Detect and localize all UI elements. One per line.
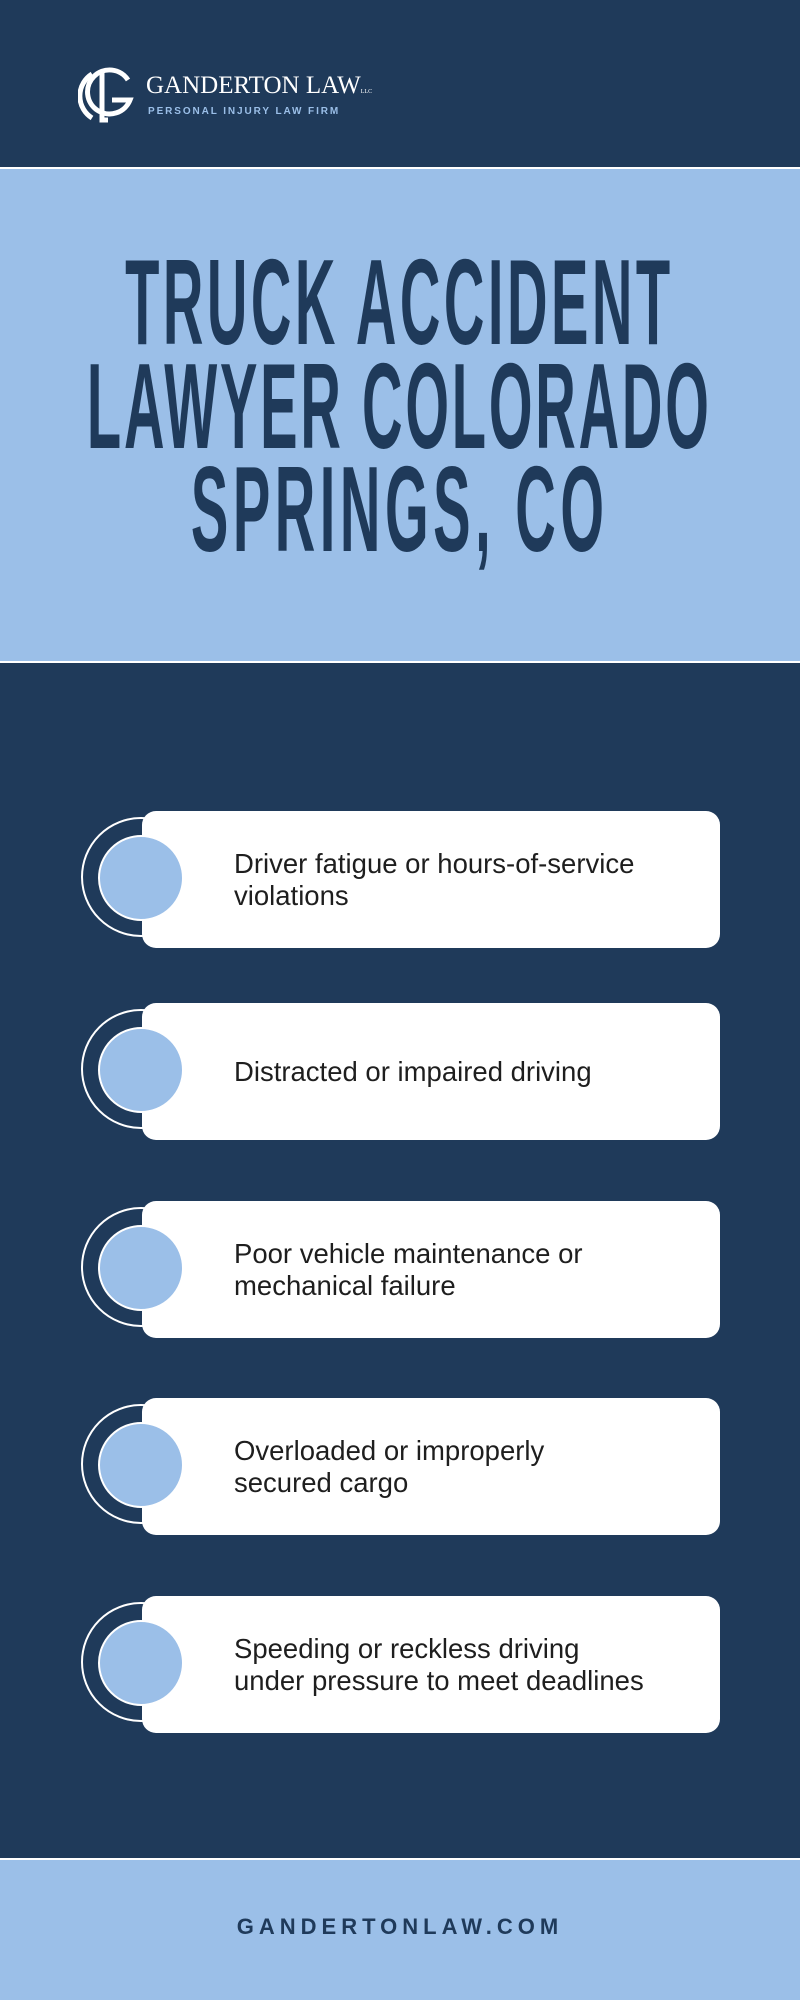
list item 4: secured cargo: [234, 1466, 408, 1498]
brand name: GANDERTON LAWLLC: [146, 72, 372, 99]
footer url: GANDERTONLAW.COM: [237, 1914, 563, 1939]
list item 5: under pressure to meet deadlines: [234, 1664, 644, 1696]
title: SPRINGS, CO: [191, 442, 604, 578]
list item 1: Driver fatigue or hours-of-service violations: [234, 848, 634, 910]
list item 5: Speeding or reckless driving: [234, 1632, 579, 1664]
logo: [78, 68, 372, 122]
icon: logo mark: [78, 68, 134, 122]
footer: [0, 1860, 800, 2000]
list item 3: Poor vehicle maintenance or mechanical failure: [234, 1238, 583, 1300]
list item 5: [81, 1596, 720, 1733]
title: LAWYER COLORADO: [87, 339, 709, 475]
list item 4: [81, 1398, 720, 1535]
list item 2: [81, 1003, 720, 1140]
tagline: PERSONAL INJURY LAW FIRM: [148, 106, 340, 117]
list item 3: [81, 1201, 720, 1338]
title: TRUCK ACCIDENT: [125, 235, 670, 371]
title: [87, 235, 709, 578]
title band: [0, 169, 800, 661]
list item 1: [81, 811, 720, 948]
header band: [0, 0, 800, 167]
list item 4: Overloaded or improperly: [234, 1434, 544, 1466]
list item 2: Distracted or impaired driving: [234, 1056, 592, 1086]
